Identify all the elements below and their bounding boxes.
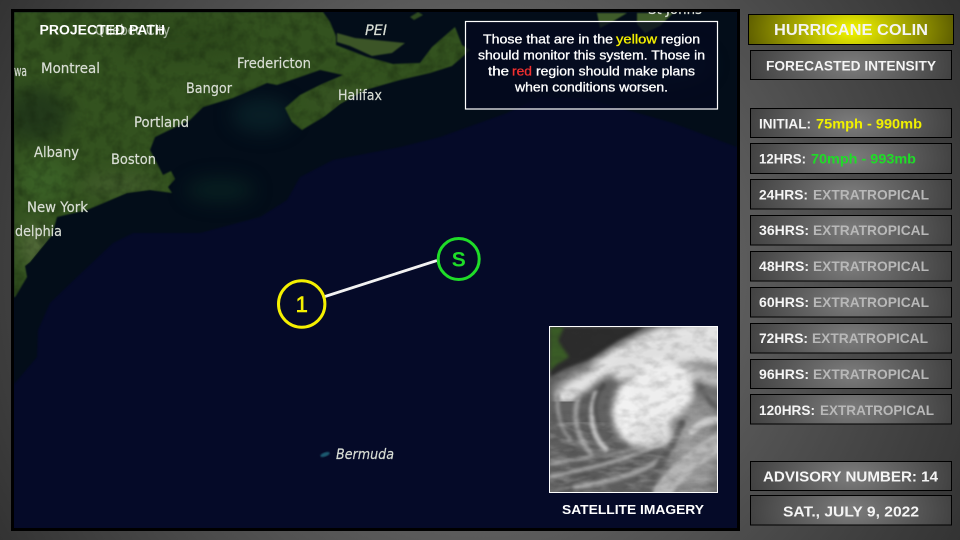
marker: S start point <box>438 238 479 280</box>
map label: Philadelphia: delphia <box>15 224 62 240</box>
caption: satellite imagery: SATELLITE IMAGERY <box>562 502 704 517</box>
forecast row: 48 hours <box>750 252 952 281</box>
forecast row: 96 hours <box>750 360 952 388</box>
map label: Ottawa: wa <box>14 64 27 80</box>
map label: Albany: Albany <box>34 145 79 161</box>
info box: advisory number: ADVISORY NUMBER: 14 <box>763 470 938 486</box>
land mass <box>2 12 673 302</box>
forecast row: 72 hours: EXTRATROPICAL <box>812 330 928 346</box>
callout: monitoring advice: yellow <box>616 32 658 46</box>
forecast row: 24 hours: EXTRATROPICAL <box>813 186 929 202</box>
map label: Bangor: Bangor <box>186 81 232 97</box>
panel: map <box>2 2 738 530</box>
forecast row: 36 hours: 36HRS: <box>759 222 809 238</box>
satellite image <box>550 326 718 492</box>
map label: Boston: Boston <box>111 152 156 168</box>
callout: monitoring advice <box>466 22 718 109</box>
callout: monitoring advice: red <box>512 64 532 78</box>
info box: date: SAT., JULY 9, 2022 <box>783 505 919 521</box>
path line <box>325 260 437 296</box>
forecast row: 24 hours <box>750 180 952 209</box>
map label: Bermuda: Bermuda <box>336 447 394 463</box>
forecast row: initial: INITIAL: <box>759 116 811 132</box>
forecast row: 12 hours: 70mph - 993mb <box>811 150 916 166</box>
callout: monitoring advice: region <box>661 32 700 46</box>
forecast row: 120 hours: EXTRATROPICAL <box>820 402 934 418</box>
callout: monitoring advice: Those that are in the <box>483 32 613 46</box>
map label: St Johns: St Johns <box>648 2 702 18</box>
callout: monitoring advice: the <box>488 64 509 78</box>
marker: 1 forecast point <box>278 281 325 327</box>
continental shelf <box>14 12 737 384</box>
forecast row: 120 hours: 120HRS: <box>759 402 815 418</box>
info box: advisory number <box>750 462 952 490</box>
forecast row: 12 hours <box>750 144 952 174</box>
marker: 1 forecast point: 1 <box>296 292 308 317</box>
map label: Portland: Portland <box>134 115 189 131</box>
heading: projected path: PROJECTED PATH <box>40 22 165 38</box>
forecast row: 96 hours: 96HRS: <box>759 366 809 382</box>
forecast row: 72 hours: 72HRS: <box>759 330 808 346</box>
forecast row: 24 hours: 24HRS: <box>759 186 808 202</box>
forecast row: 36 hours: EXTRATROPICAL <box>813 222 929 238</box>
map label: PEI: PEI <box>365 23 387 39</box>
forecast row: 96 hours: EXTRATROPICAL <box>813 366 929 382</box>
forecast row: initial <box>750 108 952 138</box>
forecast row: 60 hours: EXTRATROPICAL <box>813 294 929 310</box>
forecast row: 36 hours <box>750 216 952 245</box>
callout: monitoring advice: when conditions worsen. <box>514 80 668 94</box>
forecast row: 120 hours <box>750 394 952 424</box>
heading box: forecasted intensity <box>750 50 952 80</box>
forecast row: 60 hours <box>750 288 952 317</box>
forecast row: initial: 75mph - 990mb <box>816 116 922 132</box>
map label: New York: New York <box>27 200 89 216</box>
forecast row: 48 hours: EXTRATROPICAL <box>813 258 929 274</box>
heading box: forecasted intensity: FORECASTED INTENSITY <box>766 58 937 74</box>
map label: Fredericton: Fredericton <box>237 56 311 72</box>
map label: Montreal: Montreal <box>41 61 100 77</box>
forecast row: 48 hours: 48HRS: <box>759 258 809 274</box>
map label: Halifax: Halifax <box>338 88 382 104</box>
forecast row: 72 hours <box>750 324 952 353</box>
callout: monitoring advice: should monitor this system. Those in <box>478 48 705 62</box>
title box: Hurricane Colin <box>748 14 954 44</box>
info box: date <box>750 496 952 525</box>
callout: monitoring advice: region should make plans <box>536 64 695 78</box>
map label: Quebec City: Quebec City <box>95 23 170 39</box>
marker: S start point: S <box>452 248 466 272</box>
icon: Bermuda island <box>320 451 330 458</box>
title box: Hurricane Colin: HURRICANE COLIN <box>774 22 928 39</box>
forecast row: 12 hours: 12HRS: <box>759 150 806 166</box>
forecast row: 60 hours: 60HRS: <box>759 294 809 310</box>
